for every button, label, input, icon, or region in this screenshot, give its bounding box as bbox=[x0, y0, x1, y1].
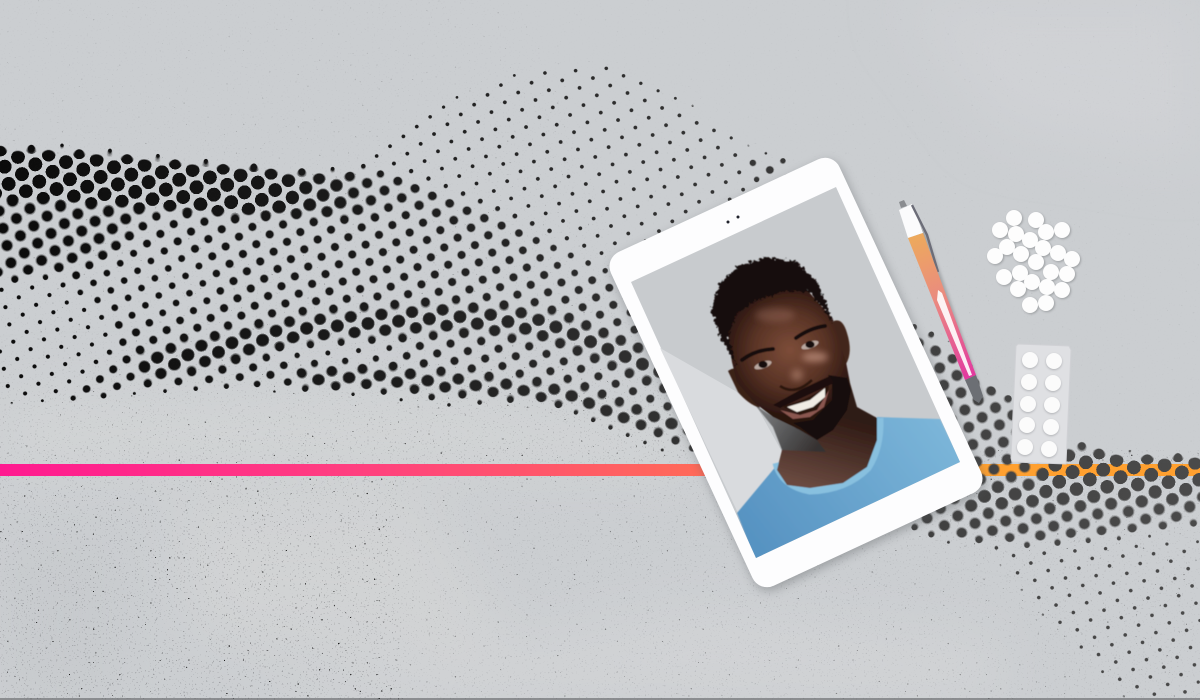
right ear bbox=[832, 320, 850, 366]
barrel highlight bbox=[937, 290, 972, 376]
neck bbox=[777, 383, 877, 488]
tablet body bbox=[604, 153, 988, 592]
mouth interior bbox=[782, 385, 829, 412]
left ear bbox=[728, 368, 760, 408]
nose shadow bbox=[780, 380, 812, 390]
pen clicker bbox=[899, 200, 907, 208]
eye whites bbox=[753, 339, 820, 371]
face bbox=[726, 282, 850, 440]
shirt collar bbox=[776, 418, 880, 491]
portrait of smiling man bbox=[711, 257, 965, 562]
pen barrel bbox=[908, 233, 976, 380]
loose pills bbox=[987, 210, 1080, 313]
moustache bbox=[773, 376, 834, 408]
eyebrows bbox=[742, 326, 825, 360]
tablet screen bbox=[631, 187, 960, 558]
screen glare bbox=[660, 348, 782, 513]
gradient line: pink to coral bbox=[0, 464, 720, 476]
pen clip bbox=[912, 205, 938, 272]
hair bbox=[711, 257, 833, 366]
teeth bbox=[787, 388, 825, 412]
lower lip bbox=[780, 390, 829, 419]
blue t-shirt bbox=[737, 417, 965, 562]
pen cap bbox=[899, 204, 923, 238]
pen tip bbox=[965, 375, 983, 403]
blister pills bbox=[1017, 352, 1062, 457]
blister foil bbox=[1011, 344, 1071, 464]
neck shadow bbox=[755, 405, 826, 452]
eye irises bbox=[758, 341, 815, 368]
camera dots bbox=[726, 216, 740, 224]
face highlights bbox=[755, 308, 828, 381]
pen bbox=[899, 200, 985, 403]
tablet bbox=[604, 153, 990, 596]
beard bbox=[794, 374, 852, 440]
gradient line: orange bbox=[960, 464, 1200, 476]
blister pack bbox=[1011, 344, 1071, 464]
